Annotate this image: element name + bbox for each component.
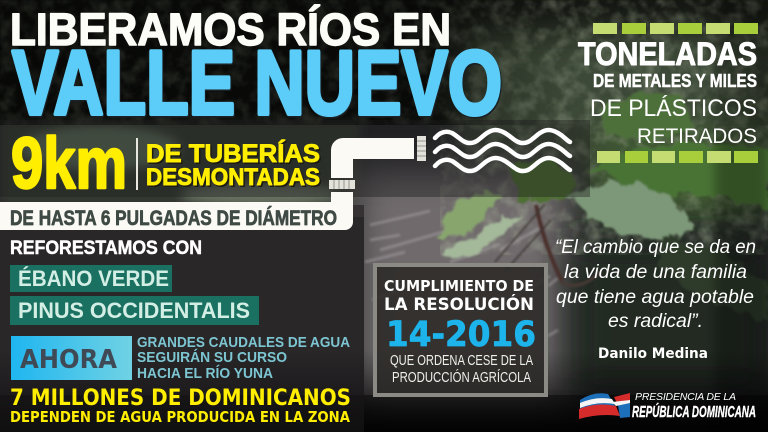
text: grandes caudales: GRANDES CAUDALES DE AGUA (137, 334, 350, 351)
panel heading: CUMPLIMIENTO DE (384, 277, 534, 295)
translucent band behind pipe (0, 120, 590, 197)
text: toneladas de metales y miles de plásticos retirados: RETIRADOS (637, 125, 757, 148)
quote: es radical”. (608, 311, 703, 332)
quote: que tiene agua potable (556, 287, 754, 308)
headline: de tuberías desmontadas: DESMONTADAS (148, 166, 322, 192)
logo text: PRESIDENCIA DE LA (635, 391, 736, 403)
panel heading (384, 277, 534, 315)
panel: resolución 14-2016 (375, 265, 546, 395)
text: grandes caudales: HACIA EL RÍO YUNA (137, 365, 273, 382)
quote: “El cambio que se da en (555, 237, 756, 258)
title: Valle Nuevo: VALLE NUEVO (13, 34, 503, 136)
text: toneladas de metales y miles de plásticos retirados: DE PLÁSTICOS (590, 95, 757, 122)
label: pipe diameter: DE HASTA 6 PULGADAS DE DIÁMETRO (10, 207, 337, 230)
leaves (438, 90, 768, 320)
headline: de tuberías desmontadas: DESMONTADAS (146, 164, 320, 191)
quote: la vida de una familia (564, 262, 747, 283)
title: Valle Nuevo: VALLE NUEVO (12, 33, 502, 134)
headline: de tuberías desmontadas: DE TUBERÍAS (148, 140, 322, 170)
text: dependen de agua: DEPENDEN DE AGUA PRODUCIDA EN LA ZONA (10, 408, 350, 426)
decoration: bottom green bars (597, 151, 758, 163)
translucent left column panel (0, 217, 364, 432)
tag: ébano verde: ÉBANO VERDE (18, 266, 169, 291)
icon: pipe (0, 136, 426, 230)
headline: de tuberías desmontadas: DE TUBERÍAS (146, 139, 320, 168)
panel note: PRODUCCIÓN AGRÍCOLA (392, 369, 531, 386)
stat: 7 millones de dominicanos: 7 MILLONES DE DOMINICANOS (10, 386, 351, 411)
heading: reforestamos con: REFORESTAMOS CON (10, 238, 202, 259)
text: toneladas de metales y miles de plásticos retirados (578, 36, 757, 148)
decoration: top green bars (593, 23, 758, 34)
river streaks (365, 211, 558, 336)
icon: dominican flag (579, 393, 630, 419)
tag: pinus occidentalis: PINUS OCCIDENTALIS (18, 298, 250, 323)
badge: ahora (11, 336, 132, 380)
logo text (632, 391, 756, 421)
panel note (390, 352, 533, 386)
badge: ahora: AHORA (20, 345, 117, 375)
panel heading: LA RESOLUCIÓN (384, 293, 534, 315)
text: grandes caudales (137, 334, 350, 382)
icon: water waves (435, 130, 570, 171)
logo: presidencia de la república dominicana (579, 391, 756, 421)
text: grandes caudales: SEGUIRÁN SU CURSO (137, 349, 287, 366)
divider (136, 138, 138, 190)
headline: de tuberías desmontadas (146, 139, 322, 192)
quote (555, 237, 756, 332)
resolution number: 14-2016 (386, 315, 536, 355)
quote author: Danilo Medina (598, 346, 708, 362)
panel note: QUE ORDENA CESE DE LA (390, 352, 533, 369)
title: Liberamos ríos en: LIBERAMOS RÍOS EN (10, 4, 451, 55)
headline: 9km: 9km (11, 124, 127, 204)
